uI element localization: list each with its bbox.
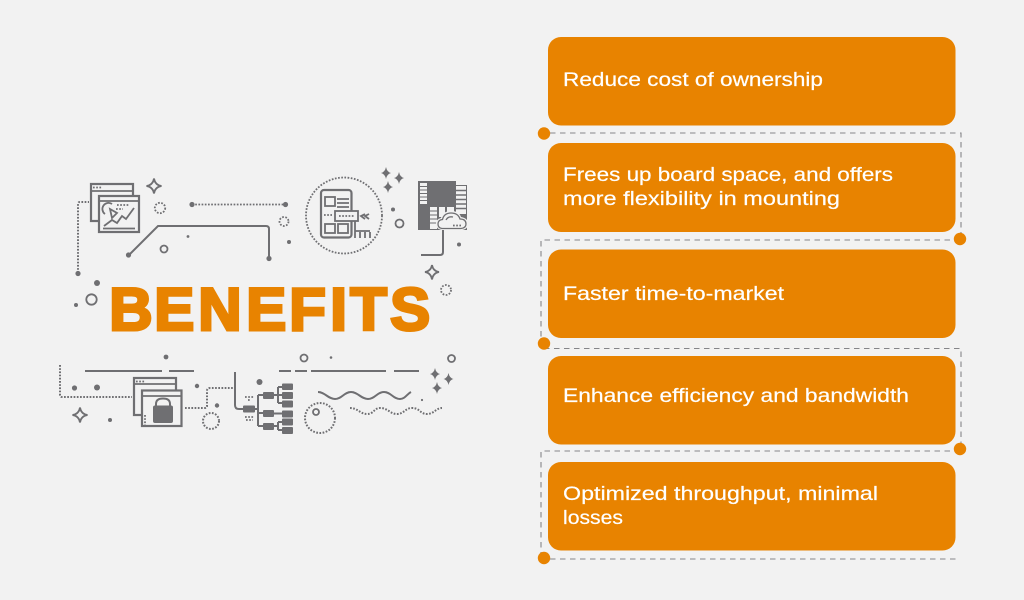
lower left traces and dots [60,355,234,429]
card: frees up board space [548,143,956,232]
top-left circuit traces [75,202,288,276]
icon: browser window with padlock [134,378,182,426]
icon: network tree [235,372,293,434]
card: optimized throughput: Optimized throughput, minimal [563,483,878,505]
lower right lines, waves and sparkles [279,354,455,433]
title: BENEFITS: BENEFITS [109,276,430,343]
dashed connector path linking the cards [538,127,966,564]
sparkles, upper right [381,167,404,228]
card: faster time-to-market: Faster time-to-market [563,283,785,305]
card: enhance efficiency and bandwidth: Enhance efficiency and bandwidth [563,385,909,407]
card: frees up board space: more flexibility in mounting [563,188,840,210]
card: reduce cost of ownership [548,37,956,126]
icon: device in dotted circle [306,178,382,254]
card: frees up board space: Frees up board space, and offers [563,164,893,186]
icon: browser windows with charts [91,184,139,232]
card: optimized throughput [548,462,956,550]
card: optimized throughput: losses [563,507,623,529]
card: enhance efficiency and bandwidth [548,356,956,444]
card: faster time-to-market [548,250,956,338]
decorative dots and rings, upper left [74,178,291,307]
icon: data blocks with cloud [418,181,468,295]
card: reduce cost of ownership: Reduce cost of ownership [563,69,823,91]
